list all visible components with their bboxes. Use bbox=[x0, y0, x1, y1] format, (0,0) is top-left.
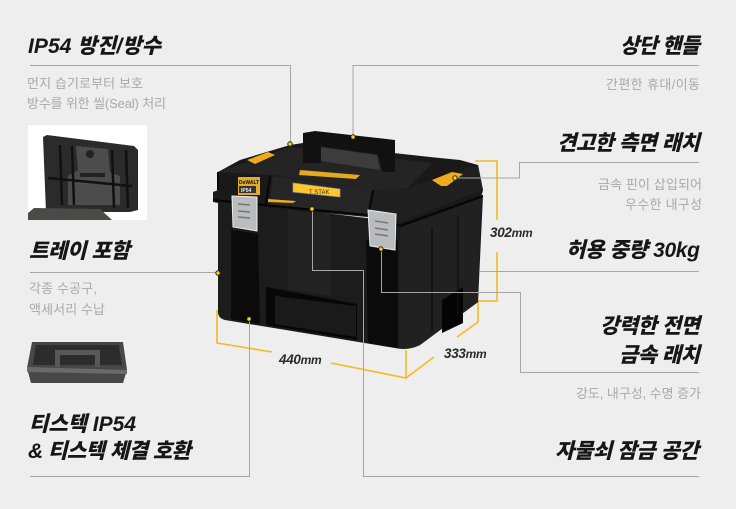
heading: compatibility: 티스텍 IP54 bbox=[29, 413, 136, 436]
TSTAK plate: T STAK bbox=[309, 190, 329, 196]
text: tray description: 각종 수공구, bbox=[29, 281, 97, 296]
TSTAK plate bbox=[293, 183, 340, 197]
text: side latch description: 금속 핀이 삽입되어 bbox=[598, 177, 702, 192]
heading: front latch bbox=[600, 315, 703, 367]
text: IP54 description: 방수를 위한 씰(Seal) 처리 bbox=[27, 96, 166, 111]
heading: tray: 트레이 포함 bbox=[29, 240, 134, 263]
heading: load: 허용 중량 30kg bbox=[566, 239, 700, 262]
heading: IP54: IP54 방진/방수 bbox=[28, 35, 163, 58]
IP54 badge: DeWALT bbox=[239, 180, 259, 186]
heading: compatibility bbox=[28, 413, 194, 463]
product: toolbox bbox=[213, 131, 483, 349]
metal latches bbox=[232, 196, 396, 250]
text: IP54 description: 먼지 습기로부터 보호 bbox=[27, 76, 143, 91]
DEWALT label bbox=[299, 170, 360, 179]
text: IP54 description bbox=[27, 76, 166, 111]
text: front latch description: 강도, 내구성, 수명 증가 bbox=[576, 386, 701, 401]
heading: compatibility: & 티스텍 체결 호환 bbox=[28, 440, 194, 463]
heading: top handle: 상단 핸들 bbox=[620, 35, 703, 58]
text: tray description: 액세서리 수납 bbox=[29, 302, 105, 317]
text: side latch description: 우수한 내구성 bbox=[625, 197, 702, 212]
image: open lid bbox=[28, 125, 147, 220]
toolbox lid bbox=[213, 143, 483, 228]
heading: front latch: 금속 래치 bbox=[619, 344, 703, 367]
dimension lines bbox=[217, 161, 497, 378]
leader lines bbox=[30, 66, 699, 476]
label: depth: 333mm bbox=[444, 346, 487, 361]
marker dots bbox=[216, 135, 457, 321]
text: handle description: 간편한 휴대/이동 bbox=[606, 77, 700, 92]
heading: padlock: 자물쇠 잠금 공간 bbox=[555, 440, 702, 463]
heading: side latch: 견고한 측면 래치 bbox=[557, 132, 703, 155]
toolbox body bbox=[218, 195, 483, 349]
yellow side latches bbox=[247, 152, 275, 164]
text: side latch description bbox=[598, 177, 702, 212]
IP54 badge bbox=[238, 177, 260, 195]
text: tray description bbox=[29, 281, 105, 317]
IP54 badge: IP54 bbox=[241, 188, 252, 194]
image: tray bbox=[27, 342, 127, 383]
label: width: 440mm bbox=[278, 352, 322, 367]
carry handle bbox=[303, 131, 395, 172]
label: height: 302mm bbox=[490, 225, 533, 240]
heading: front latch: 강력한 전면 bbox=[600, 315, 703, 338]
